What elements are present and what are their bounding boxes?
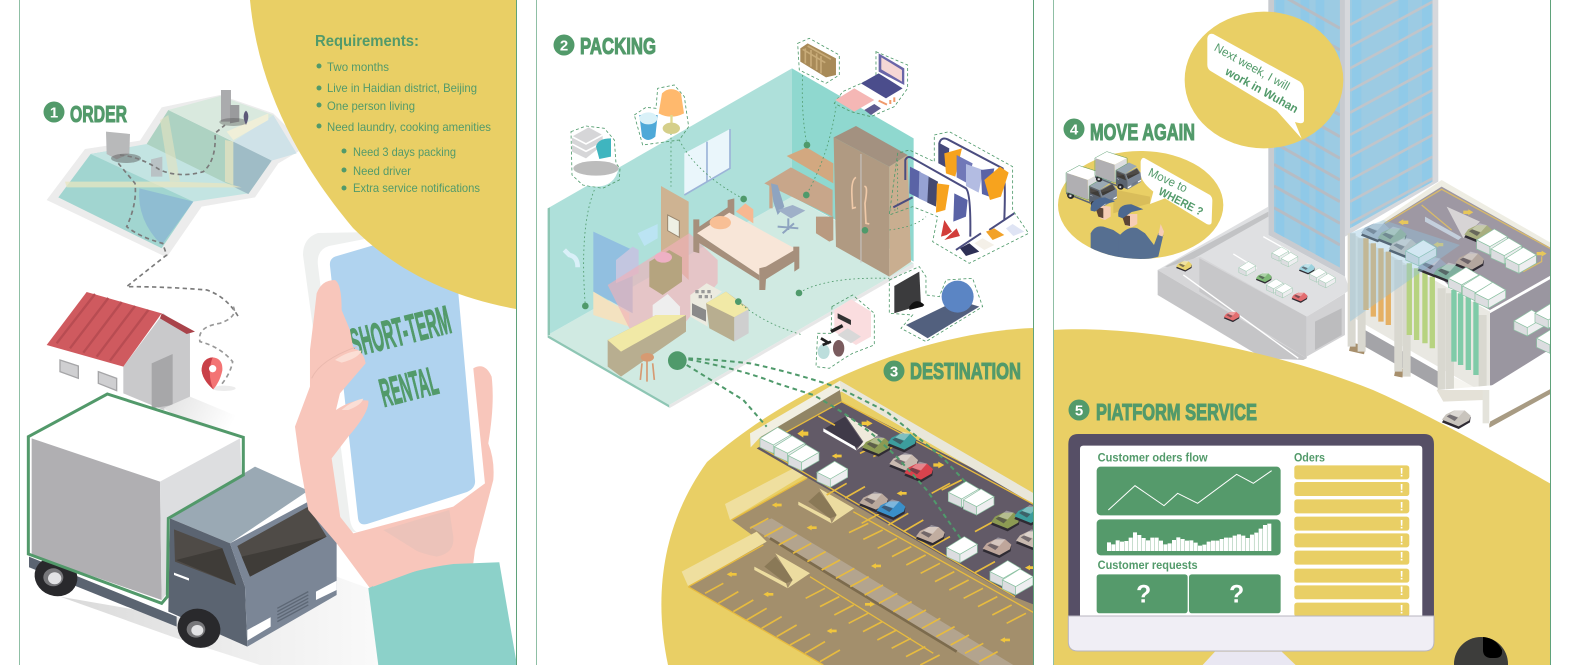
items: laptop and stationery: [834, 52, 908, 117]
delivery truck: [28, 394, 337, 654]
panel: order: [28, 0, 517, 665]
step 4 badge: [1064, 118, 1084, 140]
parked cars and white containers: [760, 427, 1045, 595]
top parking deck: [750, 381, 1035, 605]
desktop monitor: Customer requests: [1098, 558, 1198, 572]
desktop monitor: !: [1400, 466, 1404, 480]
step 3 badge: 3: [890, 364, 898, 380]
isometric room: [548, 68, 914, 408]
speech bubble: move to where: Move to: [1146, 165, 1190, 195]
dashed routes from room to parking: [687, 358, 967, 540]
tower podium with ramp: [1158, 207, 1350, 360]
requirements list: Need 3 days packing: [353, 145, 456, 159]
wardrobe: [834, 126, 911, 277]
requirements list: [316, 60, 491, 195]
desktop monitor: !: [1400, 533, 1404, 547]
requirements list: Need laundry, cooking amenities: [327, 120, 491, 134]
heading: destination: DESTINATION: [910, 358, 1021, 384]
yellow platform background: [1053, 329, 1551, 665]
panel: packing and destination: [548, 33, 1045, 665]
step 5 badge: [1068, 400, 1090, 420]
step 2 badge: 2: [560, 38, 568, 54]
background yellow quarter: [250, 0, 516, 309]
panel: move again and platform: [1053, 0, 1567, 665]
requirements list: Extra service notifications: [353, 181, 480, 195]
heading: packing: PACKING: [580, 33, 656, 59]
ground shadow: [60, 396, 346, 665]
items: clothes rack: [889, 132, 1029, 263]
room dotted connectors: [582, 75, 926, 370]
requirements list: One person living: [327, 99, 415, 113]
items: coffee machine and appliances: [816, 295, 874, 368]
desktop monitor: !: [1400, 500, 1404, 514]
requirements list: Two months: [327, 60, 389, 74]
items: books: [798, 38, 839, 83]
heading: move again: MOVE AGAIN: [1090, 119, 1195, 145]
speech bubble: work in Wuhan: Next week, I will: [1212, 40, 1292, 93]
step 5 badge: 5: [1075, 402, 1083, 420]
heading: short-term rental on phone: [350, 305, 452, 408]
heading: order: ORDER: [70, 101, 127, 127]
heading: platform service: PIATFORM SERVICE: [1096, 399, 1257, 425]
desktop monitor: !: [1400, 549, 1404, 563]
bed: [693, 198, 799, 290]
phone body: [303, 232, 476, 532]
desktop monitor: !: [1400, 517, 1404, 531]
underground parking levels: [682, 468, 1035, 665]
panel: order: RENTAL: [376, 359, 442, 416]
location pin: [202, 357, 236, 391]
house: [47, 292, 195, 417]
dashed route to pin: [200, 307, 234, 392]
office tower: [1268, 0, 1438, 277]
desktop monitor: !: [1400, 568, 1404, 582]
step 3 badge: [884, 360, 904, 382]
dark circular badge, bottom right: [1454, 637, 1508, 665]
items: game console and yoga ball: [889, 267, 983, 342]
speech bubble: work in Wuhan: work in Wuhan: [1222, 64, 1301, 116]
step 1 badge: 1: [50, 104, 58, 122]
desktop monitor: Customer oders flow: [1098, 451, 1208, 465]
requirements list: Live in Haidian district, Beijing: [327, 81, 477, 95]
car park foundations over background: [1427, 380, 1552, 429]
panel: order: SHORT-TERM: [346, 298, 455, 366]
speech bubble: move to where: [1058, 151, 1223, 263]
desktop monitor: Oders: [1294, 451, 1325, 465]
requirements list: Need driver: [353, 164, 411, 178]
speech bubble: work in Wuhan: [1185, 12, 1343, 148]
hand and sleeve: [295, 280, 517, 665]
step 1 badge: [44, 102, 64, 122]
requirements heading: Requirements:: [315, 33, 419, 50]
yellow destination background: [661, 328, 1033, 665]
isometric map: [47, 90, 307, 317]
items: towels and bowl: [571, 126, 620, 188]
desktop monitor: [1068, 434, 1434, 665]
desktop monitor: !: [1400, 602, 1404, 616]
step 4 badge: 4: [1070, 122, 1079, 138]
desktop monitor: ?: [1229, 581, 1244, 608]
multi-storey car park: [1350, 180, 1567, 428]
desk and shelf: [764, 147, 833, 242]
desktop monitor: ?: [1136, 581, 1151, 608]
desktop monitor: !: [1400, 584, 1404, 598]
desktop monitor: !: [1400, 481, 1404, 495]
speech bubble: move to where: WHERE ?: [1156, 186, 1205, 219]
step 2 badge: [554, 34, 574, 56]
items: bucket and lamp: [634, 85, 689, 145]
